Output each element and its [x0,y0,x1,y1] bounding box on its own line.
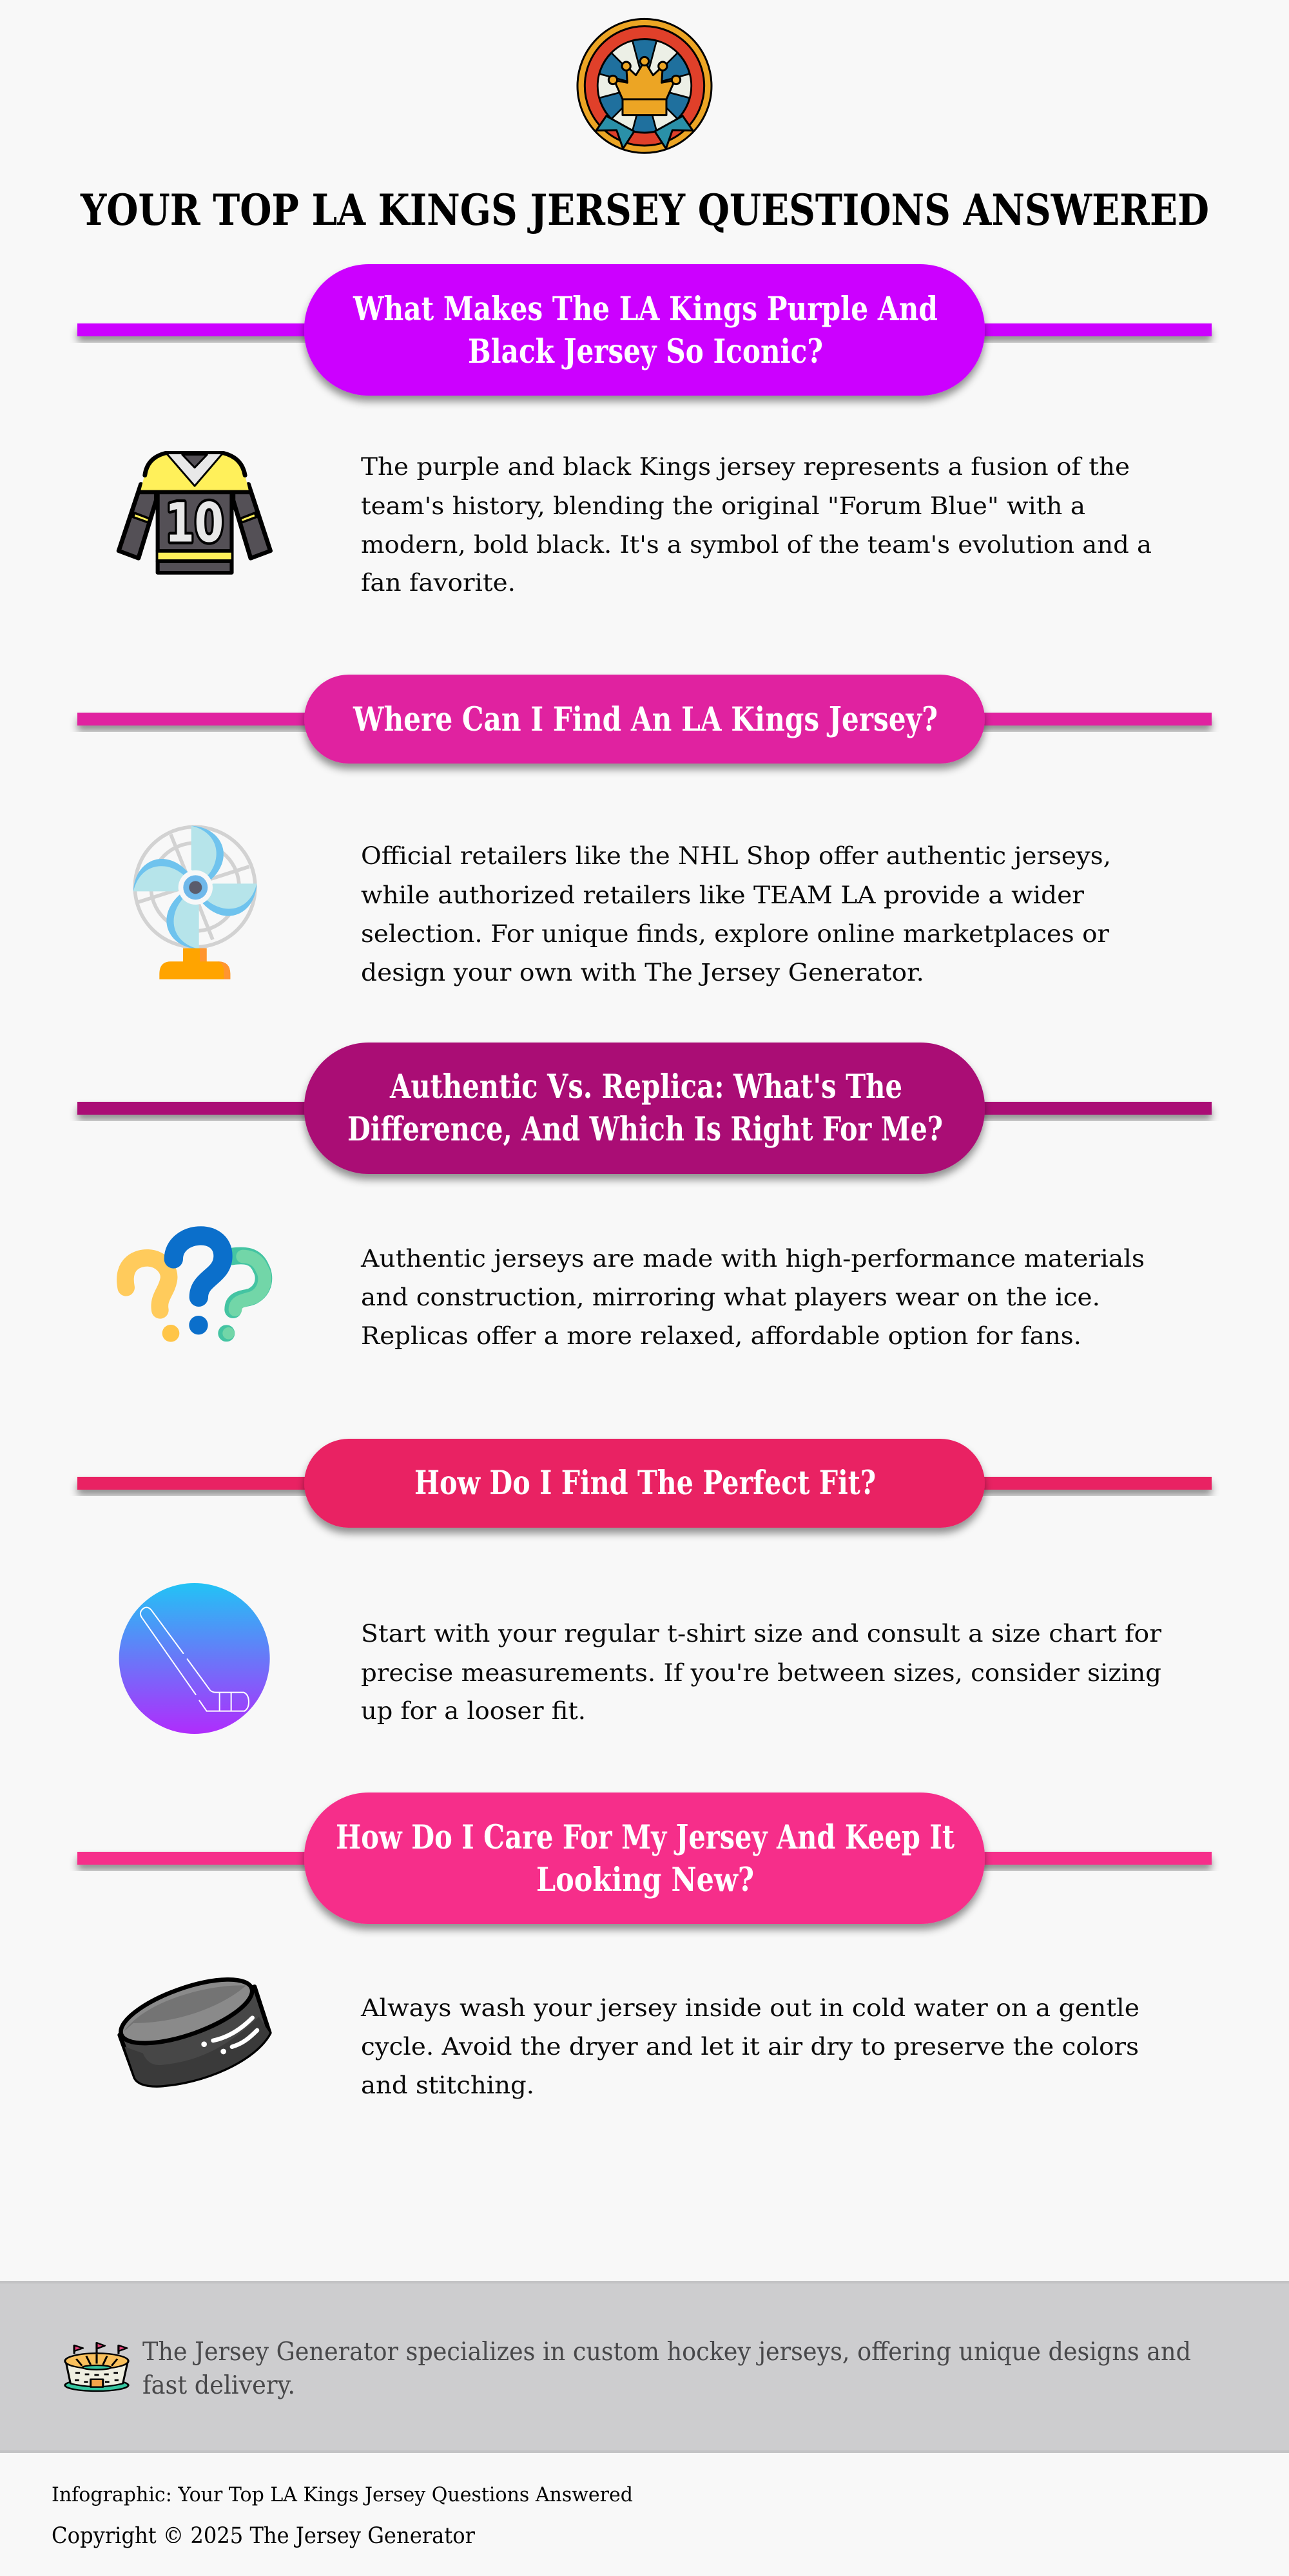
icon: hockey jersey [119,453,271,573]
answer text 3: Authentic jerseys are made with high-performance materials [360,1245,1145,1273]
answer text 2: design your own with The Jersey Generator. [361,959,924,986]
panel: question 5 [77,1793,1212,2099]
answer text 1: The purple and black Kings jersey represents a fusion of the [361,453,1130,481]
answer text 5: and stitching. [361,2071,534,2099]
answer text 2: Official retailers like the NHL Shop offer authentic jerseys, [361,842,1111,870]
heading band: question 4: How Do I Find The Perfect Fit? [414,1464,876,1503]
company note text: The Jersey Generator specializes in custom hockey jerseys, offering unique designs and [142,2338,1191,2367]
icon: hockey puck [113,1966,269,2086]
icon: question marks [125,1236,265,1342]
icon: hockey jersey: 10 [165,492,224,555]
heading band: question 4 [77,1439,1212,1528]
heading band: question 1 [77,264,1212,396]
panel: question 1 [77,264,1212,597]
answer text 1: fan favorite. [361,569,516,597]
heading band: question 3 [77,1043,1212,1174]
answer text 2 [361,842,1111,986]
answer text 1: team's history, blending the original "Forum Blue" with a [361,492,1085,520]
heading band: question 1: What Makes The LA Kings Purple And [353,290,938,329]
answer text 4: up for a looser fit. [361,1697,586,1725]
answer text 5 [360,1994,1139,2099]
answer text 5: Always wash your jersey inside out in cold water on a gentle [360,1994,1139,2022]
heading band: question 1: Black Jersey So Iconic? [468,332,823,371]
icon: crown logo badge [577,19,712,153]
panel: question 2 [77,675,1212,986]
answer text 1: modern, bold black. It's a symbol of the team's evolution and a [361,531,1152,559]
heading band: question 3: Difference, And Which Is Right For Me? [347,1110,943,1149]
icon: stadium [65,2343,128,2391]
answer text 2: selection. For unique finds, explore online marketplaces or [361,920,1109,948]
answer text 2: while authorized retailers like TEAM LA provide a wider [361,881,1084,909]
heading band: question 5 [77,1793,1212,1924]
answer text 4: precise measurements. If you're between sizes, consider sizing [361,1659,1161,1687]
company note text: fast delivery. [142,2371,295,2400]
answer text 3: Replicas offer a more relaxed, affordable option for fans. [361,1322,1081,1350]
panel: question 4 [77,1439,1212,1734]
answer text 4 [361,1620,1161,1725]
icon: desk fan [133,826,257,979]
heading band: question 2: Where Can I Find An LA Kings Jersey? [353,700,938,739]
heading band: question 5: How Do I Care For My Jersey And Keep It [336,1818,955,1857]
answer text 4: Start with your regular t-shirt size and consult a size chart for [361,1620,1161,1648]
footer source line: Infographic: Your Top LA Kings Jersey Questions Answered [52,2483,633,2506]
heading band: question 5: Looking New? [536,1861,754,1899]
answer text 5: cycle. Avoid the dryer and let it air dry to preserve the colors [361,2033,1139,2061]
answer text 3 [360,1245,1145,1350]
icon: hockey stick in gradient circle [119,1583,270,1734]
company note text [142,2338,1191,2400]
answer text 1 [361,453,1152,597]
answer text 3: and construction, mirroring what players wear on the ice. [361,1283,1100,1311]
footer copyright line: Copyright © 2025 The Jersey Generator [52,2523,475,2549]
heading band: question 2 [77,675,1212,764]
footer [52,2483,633,2549]
panel: question 3 [77,1043,1212,1350]
panel: company note band [0,2281,1289,2453]
heading band: question 3: Authentic Vs. Replica: What's The [389,1068,902,1106]
